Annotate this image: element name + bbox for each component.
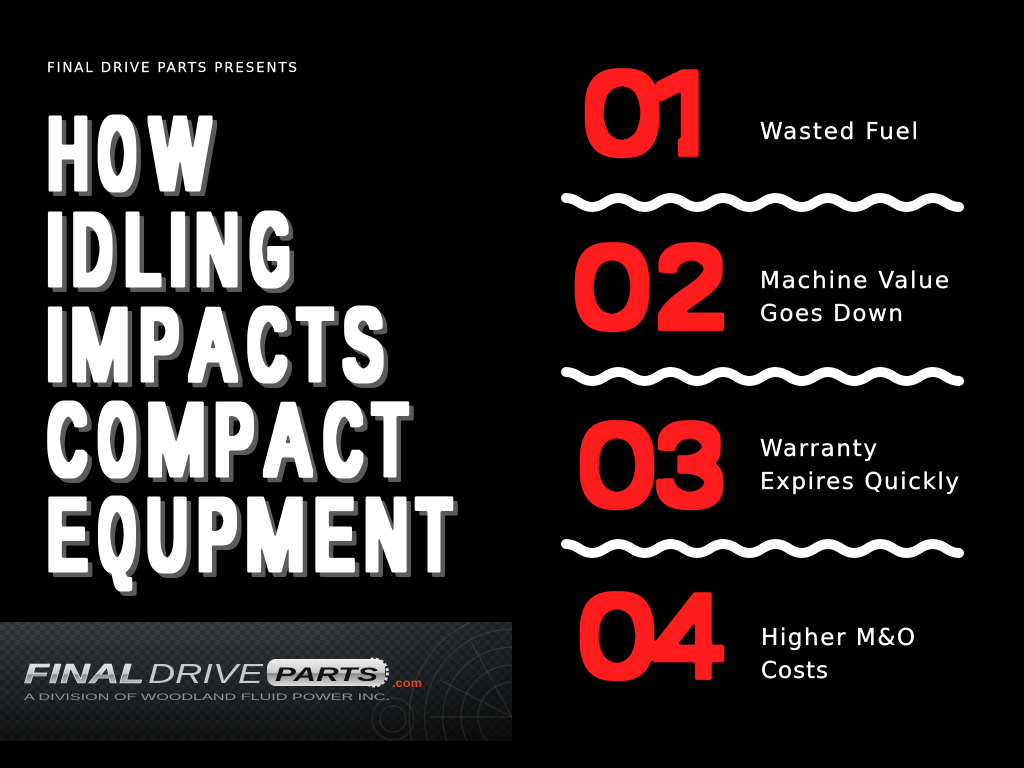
- title line: compact: A: [267, 384, 309, 496]
- title line: impacts: T: [299, 289, 331, 401]
- number 03: [577, 402, 726, 528]
- logo word: drive: DRIVE: [148, 658, 263, 689]
- title line: idling: G: [251, 194, 289, 306]
- title line: impacts: I: [46, 289, 64, 401]
- number 01: 0: [582, 50, 662, 176]
- label: warranty: Warranty: [760, 436, 877, 462]
- title line: equpment: Q: [100, 479, 134, 591]
- title line: equpment: U: [147, 479, 187, 591]
- logo banner: [0, 622, 512, 741]
- title line: how: [48, 98, 218, 210]
- number 01: [582, 50, 699, 176]
- title line: equpment: T: [418, 479, 450, 591]
- label: machine value: Machine Value: [760, 268, 949, 294]
- banner right shade: [0, 622, 512, 741]
- label: wasted fuel: Wasted Fuel: [760, 119, 918, 145]
- title line: equpment: M: [245, 479, 305, 591]
- title line: idling: I: [169, 194, 187, 306]
- title line: compact: T: [374, 384, 406, 496]
- pill shape: [267, 659, 385, 686]
- number 04: [577, 573, 725, 699]
- eyebrow: final drive parts presents: FINAL DRIVE PARTS PRESENTS: [47, 60, 297, 76]
- title line: idling: [46, 194, 294, 306]
- label: expires quickly: Expires Quickly: [760, 469, 959, 495]
- carbon fibre texture: [0, 622, 512, 741]
- number 03: 0: [577, 402, 657, 528]
- title line: equpment: P: [198, 479, 236, 591]
- title line: impacts: A: [192, 289, 234, 401]
- title line: compact: C: [49, 384, 85, 496]
- wave divider 2: [566, 372, 959, 381]
- number 02: [572, 224, 728, 350]
- title line: how: O: [99, 98, 135, 210]
- title line: idling: D: [73, 194, 111, 306]
- wave divider 1: [566, 198, 959, 207]
- logo word: final: FINAL: [24, 658, 144, 689]
- logo suffix: .com: .com: [392, 676, 422, 690]
- pill gear teeth: [360, 659, 388, 686]
- title line: impacts: C: [249, 289, 285, 401]
- title line: how: H: [48, 98, 87, 210]
- title line: equpment: E: [315, 479, 353, 591]
- title line: impacts: [46, 289, 388, 401]
- title line: compact: O: [99, 384, 135, 496]
- title line: equpment: [48, 479, 458, 596]
- title line: idling: I: [46, 194, 64, 306]
- number 04: 0: [577, 573, 657, 699]
- title line: impacts: P: [140, 289, 178, 401]
- title line: equpment: E: [48, 479, 86, 591]
- wave divider 3: [566, 544, 959, 553]
- number 02: 2: [654, 224, 728, 350]
- red numbers: [574, 68, 724, 682]
- pill word: PARTS: [275, 665, 379, 686]
- title line: compact: [47, 384, 414, 496]
- title line: compact: C: [325, 384, 361, 496]
- gear line drawing: [372, 622, 512, 741]
- title line: compact: M: [146, 384, 206, 496]
- title line: impacts: M: [70, 289, 130, 401]
- number 01: 1: [643, 50, 732, 176]
- number 03: 3: [654, 402, 726, 528]
- number 02: 0: [572, 224, 652, 350]
- banner background: [0, 622, 512, 741]
- title line: how: W: [151, 98, 209, 210]
- title line: idling: L: [124, 194, 160, 306]
- logo pill: parts: [267, 659, 388, 686]
- logo tagline: A DIVISION OF WOODLAND FLUID POWER INC.: [24, 692, 390, 703]
- title line: impacts: S: [344, 289, 382, 401]
- title line: compact: P: [215, 384, 253, 496]
- label: costs: Costs: [761, 658, 828, 684]
- label: goes down: Goes Down: [760, 301, 903, 327]
- number 04: 4: [653, 573, 725, 699]
- title line: equpment: N: [365, 479, 407, 591]
- title line: idling: N: [196, 194, 238, 306]
- label: higher m&o: Higher M&O: [761, 625, 915, 651]
